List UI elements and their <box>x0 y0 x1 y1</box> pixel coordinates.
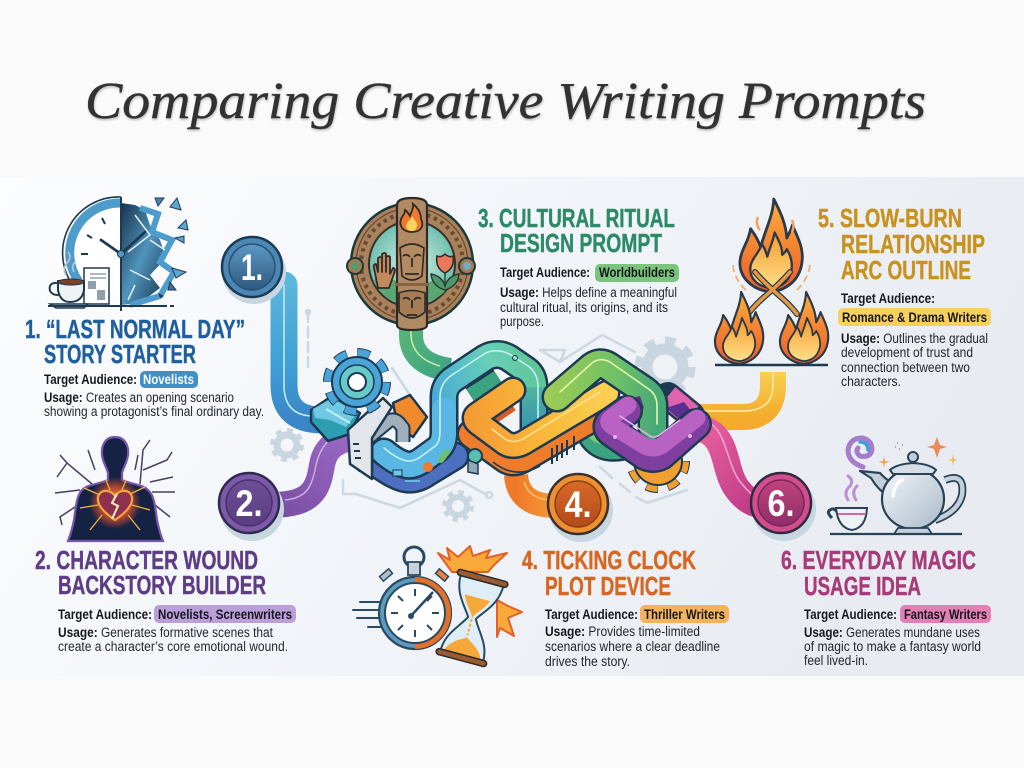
central interlocked chain <box>311 351 697 487</box>
text block 4: Target Audience: <box>545 607 638 622</box>
text block 4: PLOT DEVICE <box>545 571 671 601</box>
text block 6: of magic to make a fantasy world <box>804 639 981 654</box>
icon: grey gear lower <box>445 493 471 519</box>
chain: purple back arm <box>666 396 692 420</box>
chain: purple front link <box>608 396 697 457</box>
text block 2: BACKSTORY BUILDER <box>58 570 266 600</box>
text block 4: scenarios where a clear deadline <box>545 639 720 654</box>
icon: stopwatch and hourglass <box>353 546 522 667</box>
icon: ritual medallion with totem <box>347 198 475 330</box>
icon: grey gear upper right <box>639 341 691 393</box>
heading 3: 3. CULTURAL RITUAL <box>478 203 675 233</box>
text block 3: Worldbuilders <box>599 265 675 280</box>
text block 6: feel lived-in. <box>804 653 868 668</box>
icon: intertwined flames <box>715 199 828 365</box>
chain: orange block <box>393 395 427 437</box>
badge 4 <box>548 474 613 542</box>
central decoration: circuit lines <box>306 310 687 508</box>
badge 4: 4. <box>564 484 592 525</box>
text block 2: create a character’s core emotional wound. <box>58 639 288 654</box>
infographic panel background <box>0 177 1024 676</box>
text block 5: Target Audience: <box>841 291 935 306</box>
text block 5: Usage: Outlines the gradual <box>841 331 988 346</box>
chain: green link <box>557 360 657 428</box>
text block 4 <box>522 545 729 669</box>
text block 4: Thriller Writers <box>644 607 725 622</box>
text block 3: purpose. <box>500 314 544 329</box>
text block 5: development of trust and <box>841 345 973 360</box>
pipe 6 magenta <box>700 422 762 505</box>
badge 6: 6. <box>768 483 794 524</box>
text block 6: Target Audience: <box>804 607 897 622</box>
text block 5: connection between two <box>841 360 970 375</box>
heading 2: 2. CHARACTER WOUND <box>35 545 258 575</box>
text block 3: Usage: Helps define a meaningful <box>500 285 677 300</box>
text block 1: STORY STARTER <box>44 339 196 369</box>
text block 5: ARC OUTLINE <box>841 255 971 285</box>
chain: left teal beam <box>311 396 360 441</box>
text block 6: USAGE IDEA <box>804 571 921 601</box>
title: Comparing Creative Writing Prompts <box>85 73 926 130</box>
text block 3: Target Audience: <box>500 265 590 280</box>
icon: silhouette with broken heart <box>55 437 175 541</box>
text block 3 <box>478 203 679 329</box>
pipe 2 purple <box>270 432 350 505</box>
text block 5: Romance & Drama Writers <box>842 310 987 325</box>
text block 2: Usage: Generates formative scenes that <box>58 625 273 640</box>
heading 4: 4. TICKING CLOCK <box>522 545 696 575</box>
badge 1 <box>222 237 286 304</box>
text block 2 <box>35 545 296 654</box>
chain: grey clamp <box>348 398 403 479</box>
text block 6 <box>781 545 991 668</box>
text block 3: cultural ritual, its origins, and its <box>500 300 668 315</box>
chain: blue and teal arch link <box>372 351 538 481</box>
text block 6: Usage: Generates mundane uses <box>804 625 980 640</box>
text block 1: showing a protagonist’s final ordinary day. <box>44 404 264 419</box>
text block 2: Target Audience: <box>58 607 152 622</box>
chain: orange and yellow link <box>468 390 607 474</box>
chain: orange gear <box>632 435 684 487</box>
pipe 5 yellow <box>690 372 773 417</box>
icon: grey gear left <box>273 431 301 459</box>
pipe 4 orange <box>516 475 556 506</box>
pipe 1 blue <box>284 285 322 420</box>
text block 6: Fantasy Writers <box>904 607 987 622</box>
badge 6 <box>751 473 816 541</box>
text block 1 <box>25 314 264 419</box>
pipe 3 green <box>411 325 450 370</box>
text block 4: drives the story. <box>545 654 630 669</box>
icon: shattered clock, newspaper and coffee <box>48 197 188 311</box>
text block 5 <box>818 203 991 389</box>
badge 1: 1. <box>241 247 263 288</box>
text block 1: Novelists <box>143 372 194 387</box>
badge 2: 2. <box>236 483 262 524</box>
text block 2: Novelists, Screenwriters <box>158 607 292 622</box>
text block 4: Usage: Provides time-limited <box>545 624 700 639</box>
badge 2 <box>219 473 284 541</box>
chain: blue gear <box>329 354 385 410</box>
heading 1: 1. “LAST NORMAL DAY” <box>25 314 245 344</box>
text block 3: DESIGN PROMPT <box>500 228 662 258</box>
text block 1: Usage: Creates an opening scenario <box>44 390 234 405</box>
icon: teapot, teacup and magic swirl <box>828 437 962 534</box>
text block 5: characters. <box>841 374 901 389</box>
chain: teal inner link parts <box>472 380 622 449</box>
text block 1: Target Audience: <box>44 372 137 387</box>
heading 5: 5. SLOW-BURN <box>818 203 962 233</box>
